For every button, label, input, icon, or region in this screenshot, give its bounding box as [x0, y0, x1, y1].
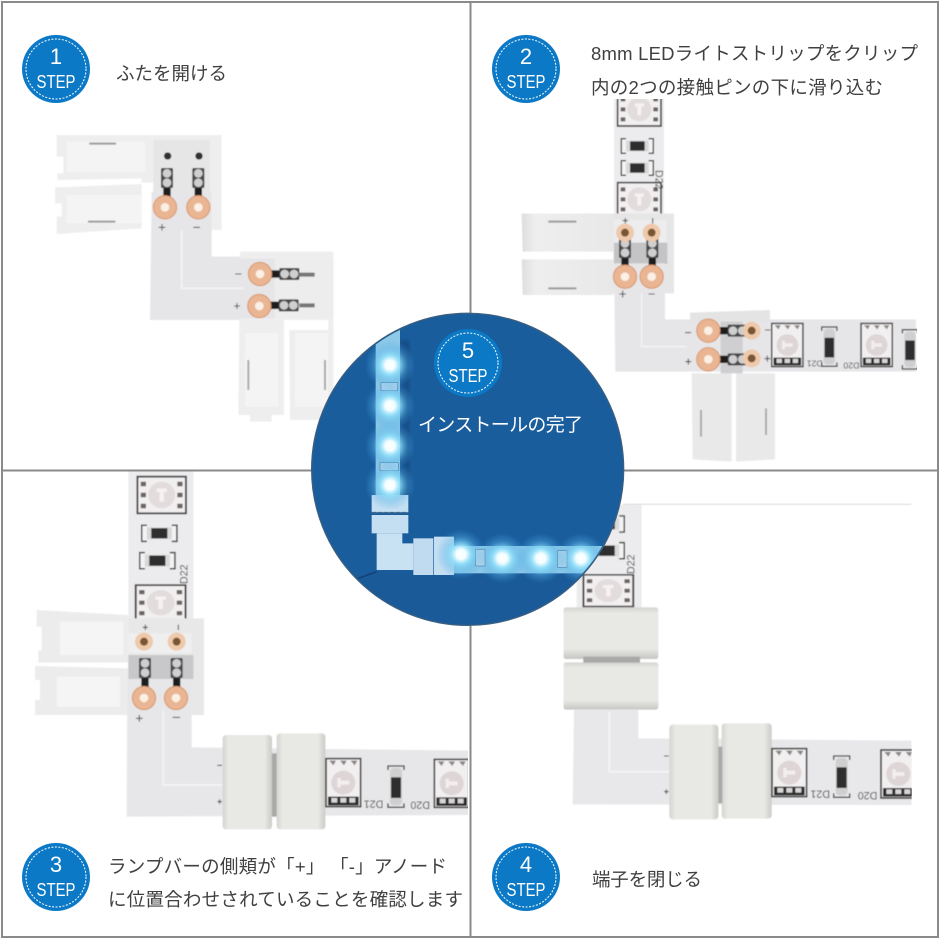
step 5 badge: 5 [462, 338, 474, 363]
panel 4: closed connector photo: D21 [810, 788, 830, 800]
horizontal strip chips [772, 323, 803, 367]
wall shadow [338, 572, 605, 630]
vertical LED strip [614, 93, 664, 220]
clip arm lower [55, 184, 142, 234]
panel 3: strip aligned and one side closed photo: D22 [178, 564, 190, 584]
step 2 badge: 2 [520, 44, 532, 69]
step 1 text: ふたを開ける [116, 63, 227, 84]
step 3 badge [22, 843, 90, 911]
open clip arms [37, 610, 128, 663]
step 5 text: インストールの完了 [418, 414, 583, 436]
step 2 text [591, 43, 918, 98]
panel 2: strip inserted in connector photo: D20 [843, 361, 859, 371]
second clip body [240, 252, 333, 333]
L-shaped circuit board [150, 192, 277, 320]
step 5 badge: STEP [448, 366, 488, 386]
closed side clip [669, 725, 718, 819]
horizontal lit strip [453, 546, 603, 573]
step 2 text: 内の2つの接触ピンの下に滑り込む [591, 77, 883, 98]
L-shaped circuit board [127, 679, 470, 817]
panel 4: closed connector photo [563, 504, 916, 819]
panel 3: strip aligned and one side closed photo: D21 [364, 798, 383, 810]
L connector [372, 495, 408, 512]
panel 3: strip aligned and one side closed photo: D20 [410, 798, 430, 810]
step 4 badge: STEP [506, 880, 546, 900]
clip arms bottom [238, 318, 284, 422]
panel 4: closed connector photo: D20 [858, 789, 877, 801]
step 1 badge [22, 35, 90, 103]
step 4 badge [492, 843, 560, 911]
clip arms [522, 213, 613, 252]
step 2 text: 8mm LEDライトストリップをクリップ [591, 43, 918, 64]
clip arm upper [57, 135, 222, 230]
contacts [139, 658, 151, 693]
step 3 badge: 3 [50, 852, 62, 877]
thin line [623, 504, 912, 505]
contacts [161, 168, 173, 203]
vertical LED strip [128, 470, 193, 623]
panel 4: closed connector photo: D22 [626, 554, 638, 574]
bottom clip arms and top [690, 310, 770, 322]
panel 5: completed installation circle [312, 313, 624, 630]
step 5 badge [434, 329, 502, 397]
LED glows [365, 340, 606, 583]
step 2 badge [492, 35, 560, 103]
L-shaped circuit board [614, 263, 916, 372]
step 3 text [108, 856, 463, 910]
step 3 text: に位置合わせされていることを確認します [108, 889, 463, 910]
strip chips [326, 759, 361, 807]
closed clip [223, 735, 272, 829]
panel 2: strip inserted in connector photo: D21 [807, 359, 823, 369]
strip chips [772, 749, 807, 797]
step 2 badge: STEP [506, 72, 546, 92]
panel 3: strip aligned and one side closed photo [35, 470, 470, 829]
step 3 text: ランプバーの側頬が「+」 「-」アノード [108, 856, 447, 877]
L-shaped circuit board [573, 709, 912, 805]
step 1 badge: 1 [50, 44, 62, 69]
step 3 badge: STEP [36, 880, 76, 900]
contacts [618, 239, 632, 266]
panel 1: open connector photo [55, 135, 333, 422]
panel 2: strip inserted in connector photo [522, 93, 918, 462]
step 4 text: 端子を閉じる [592, 869, 702, 890]
panel 2: strip inserted in connector photo: D22 [652, 170, 664, 190]
vertical LED strip [577, 505, 642, 611]
vertical lit strip [376, 327, 400, 497]
step 1 badge: STEP [36, 72, 76, 92]
closed top clip [563, 607, 658, 659]
step 4 badge: 4 [520, 852, 532, 877]
